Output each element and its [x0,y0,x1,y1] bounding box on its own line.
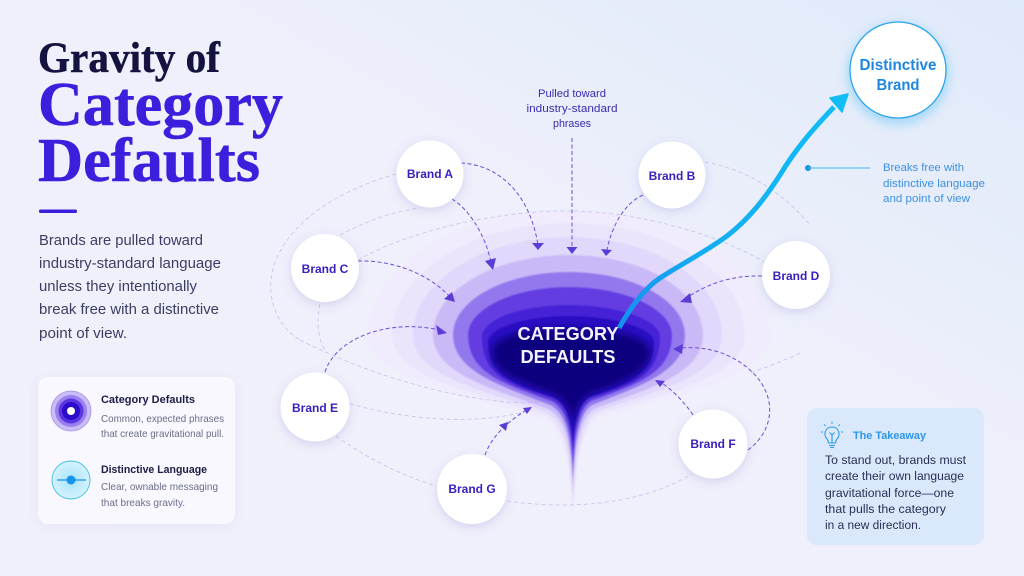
takeaway text [825,453,967,532]
vortex funnel [367,210,770,525]
title: Defaults [38,127,260,195]
brand B: Brand B [649,169,696,183]
arrow: distinctive path [619,94,848,328]
intro text: unless they intentionally [39,279,198,295]
distinctive brand circle [850,22,946,118]
annotation: pulled toward: phrases [553,118,591,130]
title: Category [38,71,283,139]
arrow: pulled toward [566,138,578,254]
icon: distinctive language [52,461,90,499]
brand A [396,140,464,208]
arrow: brand F inner [655,380,693,415]
intro text: point of view. [39,326,127,342]
arrow: brand D [680,276,762,303]
brand G: Brand G [448,482,496,496]
arrow: brand G [485,407,532,455]
title [38,35,283,195]
callout: breaks free: Breaks free with [883,162,964,174]
center label [518,323,619,367]
arrow: brand E [325,325,447,372]
callout: breaks free: and point of view [883,193,970,205]
annotation: pulled toward: industry-standard [526,103,618,115]
brand D [762,241,830,309]
takeaway text: create their own language [825,469,964,483]
legend text: distinctive language [101,464,218,509]
title rule [39,210,77,213]
legend text: distinctive language: Clear, ownable messaging [101,482,218,493]
brand F: Brand F [690,437,736,451]
brand C [291,234,359,302]
legend text: distinctive language: that breaks gravity. [101,498,185,509]
icon: category defaults [51,391,91,431]
icon: light bulb [821,422,843,448]
brand D: Brand D [773,269,820,283]
legend text: category defaults [101,394,224,440]
light orbit dashed lines [271,162,810,505]
intro text [39,233,221,342]
intro text: break free with a distinctive [39,302,219,318]
intro text: Brands are pulled toward [39,233,203,249]
brand E: Brand E [292,401,338,415]
arrow: brand F outer [673,344,770,450]
brand E [280,372,350,442]
panel: legend [38,377,235,524]
pull arrows [325,138,770,455]
brand C: Brand C [302,262,349,276]
annotation: pulled toward [526,88,618,130]
distinctive brand circle: Distinctive [860,57,937,74]
takeaway text: in a new direction. [825,518,921,532]
legend text: category defaults: Common, expected phrases [101,414,224,425]
panel: takeaway [807,408,984,545]
takeaway text: that pulls the category [825,502,947,516]
arrow: brand A right [461,163,544,250]
arrow: brand A down [452,199,496,270]
callout: breaks free: distinctive language [883,178,985,190]
brand G [437,454,507,524]
legend text: category defaults: that create gravitational pull. [101,429,224,440]
arrow: brand B [601,195,643,256]
legend text: distinctive language: Distinctive Language [101,464,207,476]
vortex core [492,328,650,430]
takeaway text: gravitational force—one [825,486,954,500]
legend text: category defaults: Category Defaults [101,394,195,406]
center label: CATEGORY [518,323,619,344]
takeaway heading: The Takeaway [853,430,927,442]
distinctive brand circle: Brand [876,77,920,94]
takeaway text: To stand out, brands must [825,453,967,467]
annotation: pulled toward: Pulled toward [538,88,606,100]
center label: DEFAULTS [520,346,616,367]
arrow: brand C [358,261,455,302]
title: Gravity of [38,35,221,82]
brand F [678,410,748,478]
callout: breaks free [805,162,985,205]
brand B [638,142,706,208]
intro text: industry-standard language [39,256,221,272]
brand A: Brand A [407,167,453,181]
